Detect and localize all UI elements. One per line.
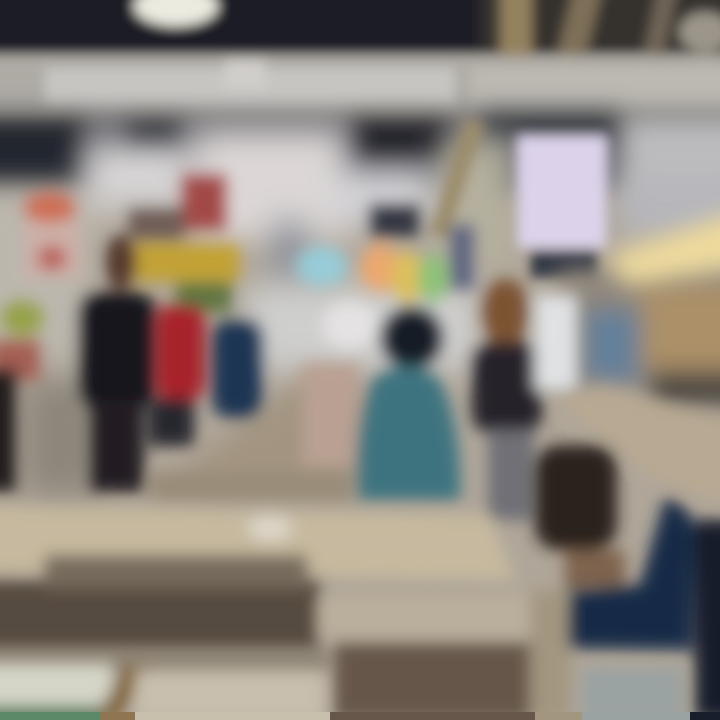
bottom right stool <box>582 668 682 720</box>
person: navy jacket <box>212 320 262 418</box>
front right table <box>318 590 570 720</box>
bottom edge colours <box>0 712 720 720</box>
rainbow display <box>296 205 474 303</box>
table underside <box>0 556 320 650</box>
yellow light strip <box>608 205 720 285</box>
dark seated figure <box>535 445 625 592</box>
front centre bench <box>135 672 325 720</box>
front long table <box>0 472 515 580</box>
right shelf area <box>560 270 720 404</box>
colourful hanging displays left <box>0 175 240 380</box>
person: teal jacket <box>357 308 460 500</box>
central aisle floor <box>150 375 360 500</box>
person: red jacket <box>148 306 205 446</box>
diagonal beam <box>429 119 485 239</box>
person: dark edge left <box>0 370 16 492</box>
person: pale figure in aisle <box>302 301 378 468</box>
ceiling banner band <box>0 56 720 112</box>
floor strip <box>0 650 330 672</box>
person: black jacket <box>80 234 156 492</box>
front left bench <box>0 664 145 720</box>
lavender screen <box>518 136 606 278</box>
ceiling <box>0 0 720 58</box>
navy chair <box>555 498 720 720</box>
right counter <box>555 385 720 512</box>
upper back wall <box>0 110 720 207</box>
middle bright wash <box>0 130 720 495</box>
person: long dark hair <box>472 278 577 520</box>
